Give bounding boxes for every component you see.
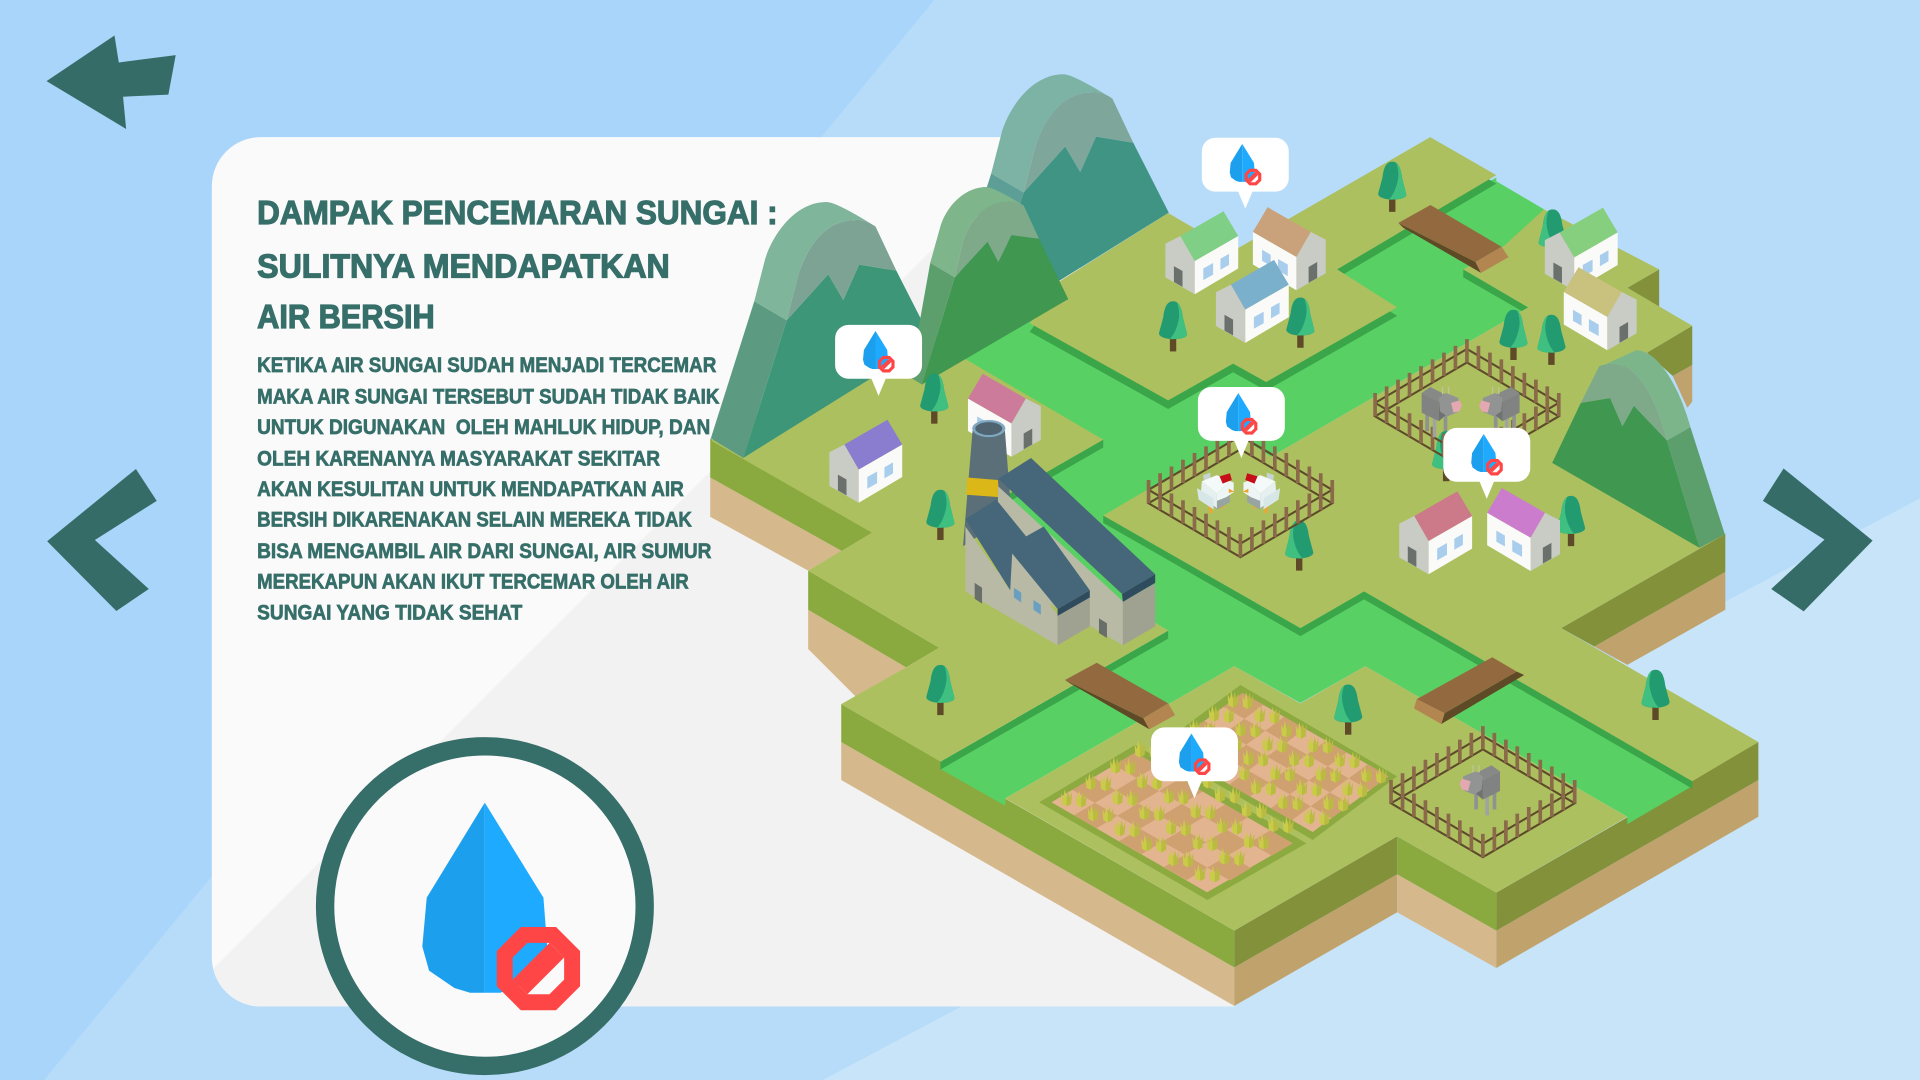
island: river: [940, 178, 1692, 824]
panel: white content card: [212, 137, 1234, 1007]
icon: back arrow: [47, 36, 176, 129]
title: [257, 195, 778, 336]
cow pen: north fence and cows: [1375, 339, 1559, 470]
text block: explanation: AKAN KESULITAN UNTUK MENDAPATKAN AIR: [257, 478, 684, 501]
callout: east houses water warning: [1443, 428, 1530, 499]
cow pen: south fence and cow: [1391, 726, 1575, 857]
mountain: right: [1552, 350, 1725, 548]
island: isometric village map: [710, 74, 1758, 1006]
bridge: north: [1398, 205, 1509, 273]
island: cliff walls: [710, 269, 1758, 1006]
island: north village land: [1030, 137, 1496, 400]
icon: large water drop with prohibition sign: [325, 746, 645, 1066]
factory: chimney and halls: [963, 420, 1155, 645]
house: brown roof: [1253, 207, 1326, 290]
trees: scattered: [920, 162, 1670, 735]
field: lower rice plot: [1039, 740, 1307, 900]
callout: north village water warning: [1202, 138, 1289, 209]
text block: explanation: BERSIH DIKARENAKAN SELAIN MEREKA TIDAK: [257, 509, 692, 532]
callout: rice field water warning: [1151, 727, 1238, 798]
house: blue roof: [1216, 260, 1289, 343]
house: pink roof: [968, 374, 1041, 457]
callout: chicken pen water warning: [1198, 387, 1285, 458]
panel: grey diagonal shade: [213, 137, 1234, 1007]
text block: explanation: MAKA AIR SUNGAI TERSEBUT SUDAH TIDAK BAIK: [257, 385, 719, 408]
house: purple roof: [829, 420, 902, 503]
field: upper rice plot: [1156, 685, 1397, 840]
house: red roof: [1399, 491, 1472, 574]
island: south field land: [1005, 666, 1627, 931]
text block: explanation: BISA MENGAMBIL AIR DARI SUNGAI, AIR SUMUR: [257, 540, 711, 563]
callout: west house water warning: [835, 325, 922, 396]
mountain: centre green: [910, 187, 1068, 384]
house: east green roof: [1545, 208, 1618, 291]
house: magenta roof: [1487, 488, 1560, 571]
text block: explanation: SUNGAI YANG TIDAK SEHAT: [257, 602, 523, 625]
icon: next chevron: [1763, 468, 1873, 611]
title: DAMPAK PENCEMARAN SUNGAI :: [257, 195, 778, 232]
bridge: south-west: [1065, 663, 1175, 729]
chicken pen: fence and chickens: [1149, 426, 1332, 557]
text block: explanation: KETIKA AIR SUNGAI SUDAH MENJADI TERCEMAR: [257, 354, 716, 377]
island: west factory land: [711, 321, 1168, 762]
text block: explanation: [257, 354, 719, 625]
house: olive roof: [1564, 267, 1637, 350]
island: east farm land: [1103, 209, 1758, 781]
background: palest diagonal band: [823, 498, 1920, 1080]
island: river banks: [940, 146, 1692, 789]
icon: previous chevron: [47, 469, 157, 611]
mountain: left: [711, 202, 932, 458]
title: AIR BERSIH: [257, 299, 435, 336]
mountain: back teal: [948, 74, 1169, 330]
text block: explanation: UNTUK DIGUNAKAN OLEH MAHLUK HIDUP, DAN: [257, 416, 710, 439]
house: green roof: [1165, 211, 1238, 294]
title: SULITNYA MENDAPATKAN: [257, 248, 670, 285]
text block: explanation: MEREKAPUN AKAN IKUT TERCEMAR OLEH AIR: [257, 570, 689, 593]
text block: explanation: OLEH KARENANYA MASYARAKAT SEKITAR: [257, 447, 660, 470]
bridge: south-east: [1414, 657, 1524, 724]
